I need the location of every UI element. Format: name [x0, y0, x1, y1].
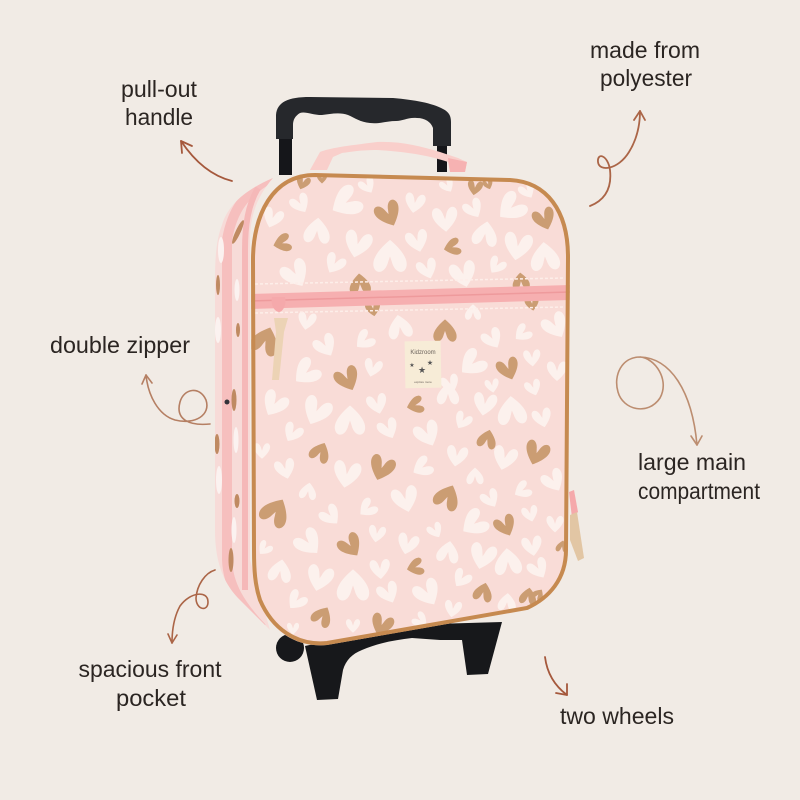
suitcase: [214, 97, 584, 700]
label: pull-out handle: pull-out: [121, 76, 198, 102]
brand label Kidzroom: ★: [427, 359, 433, 367]
tan hearts: [248, 174, 569, 639]
zipper band: [250, 285, 570, 309]
label: large main compartment: [638, 449, 761, 504]
label: spacious front pocket: [78, 656, 222, 711]
white hearts: [254, 175, 573, 635]
black pull-out handle grip: [276, 97, 451, 146]
front wheels and legs: [276, 622, 502, 700]
front panel with heart pattern: [245, 165, 575, 655]
right zipper pull: [569, 490, 584, 561]
label: pull-out handle: handle: [125, 104, 193, 130]
arrow: made from polyester: [590, 111, 645, 206]
brand label Kidzroom: Kidzroom: [410, 350, 436, 356]
arrow: two wheels: [545, 657, 567, 695]
label: spacious front pocket: spacious front: [78, 656, 222, 682]
label: pull-out handle: [121, 76, 198, 130]
arrow: pull-out handle: [181, 141, 232, 181]
arrow: double zipper: [142, 375, 210, 424]
telescopic handle stems: [279, 135, 447, 175]
tan piping outline: [253, 175, 568, 643]
label: two wheels: two wheels: [560, 703, 674, 729]
label: spacious front pocket: pocket: [116, 685, 187, 711]
label: made from polyester: [590, 37, 700, 91]
brand label Kidzroom: ★: [409, 362, 415, 369]
label: double zipper: double zipper: [50, 332, 190, 358]
label: made from polyester: polyester: [600, 65, 692, 91]
label: made from polyester: made from: [590, 37, 700, 63]
fabric carry handle: [310, 142, 467, 172]
side panel: [215, 178, 273, 630]
brand label Kidzroom: explore more: [414, 380, 432, 384]
arrow: large main compartment: [617, 357, 702, 445]
label: large main compartment: large main: [638, 449, 746, 475]
zipper pull tag: [272, 297, 288, 380]
brand label Kidzroom: ★: [418, 365, 426, 375]
arrow: spacious front pocket: [168, 570, 215, 643]
side zipper stripes: [214, 177, 272, 628]
brand label Kidzroom: [405, 341, 441, 388]
label: large main compartment: compartment: [638, 478, 761, 504]
